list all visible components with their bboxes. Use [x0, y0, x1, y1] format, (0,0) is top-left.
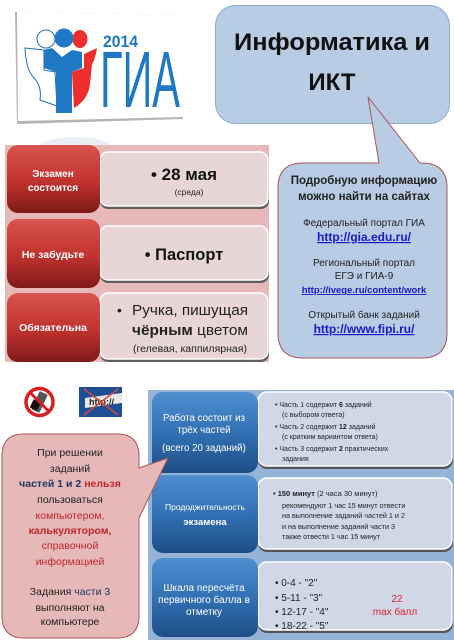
row: parts: Работа состоит из [163, 413, 246, 424]
panel: restrictions callout: компьютером, [36, 510, 104, 522]
icon: no phone [26, 388, 53, 416]
logo figures [25, 28, 97, 113]
row: score scale: 22 [391, 594, 403, 605]
row: duration: также отвести 1 час 15 минут [282, 532, 381, 541]
row: parts: • Часть 3 содержит 2 практических [275, 446, 389, 453]
row: score scale: первичного балла в [158, 594, 250, 606]
row: passport: Не забудьте [22, 249, 84, 261]
title box: Информатика и [234, 29, 430, 56]
row: duration: рекомендуют 1 час 15 минут отвести [282, 501, 405, 510]
row: duration: Прододжительность [165, 502, 246, 512]
row: score scale [152, 558, 453, 637]
panel: exam facts [5, 145, 269, 362]
row: score scale: • 18-22 - "5" [275, 621, 329, 632]
row: passport [7, 219, 269, 288]
row: score scale: • 5-11 - "3" [275, 593, 323, 604]
row: pen: (гелевая, каппилярная) [133, 344, 247, 355]
row: pen: • [117, 302, 122, 318]
panel: sites callout: Открытый банк заданий [308, 309, 420, 321]
row: parts: (всего 20 заданий) [162, 443, 246, 454]
row: parts: задания [282, 456, 309, 463]
panel: exam structure [148, 390, 454, 640]
panel: restrictions callout: Задания части 3 [30, 586, 110, 598]
title box: ИКТ [308, 69, 356, 96]
row: duration: • 150 минут (2 часа 30 минут) [273, 489, 378, 498]
row: pen [7, 293, 269, 362]
row: score scale: Шкала пересчёта [163, 583, 245, 594]
row: exam date: • 28 мая [151, 165, 217, 184]
row: pen: чёрным цветом [132, 323, 248, 339]
icon: no internet: http:// [89, 397, 114, 407]
panel: sites callout: http://www.fipi.ru/ [314, 322, 415, 336]
row: duration: на выполнение заданий частей 1 и 2 [282, 511, 405, 520]
panel: sites callout: можно найти на сайтах [298, 191, 431, 203]
panel: restrictions callout: компьютере [41, 616, 100, 628]
icon: no internet [79, 387, 122, 417]
panel: restrictions callout: частей 1 и 2 нельзя [19, 478, 121, 490]
row: exam date: (среда) [175, 187, 204, 197]
row: pen: Обязательна [19, 322, 87, 334]
panel: sites callout: Федеральный портал ГИА [303, 218, 425, 229]
panel: sites callout: http://ivege.ru/content/work [302, 285, 427, 296]
panel: sites callout: Подробную информацию [291, 175, 437, 187]
logo text: 2014 ГИА: 2014 [103, 32, 138, 51]
logo text: 2014 ГИА [100, 32, 180, 124]
panel: restrictions callout: информацией [36, 556, 104, 568]
panel: restrictions callout: заданий [50, 463, 90, 475]
row: parts: трёх частей [177, 425, 231, 436]
row: duration: экзамена [183, 517, 227, 528]
logo card [15, 12, 185, 124]
panel: restrictions callout: пользоваться [37, 494, 103, 506]
row: parts: • Часть 1 содержит 6 заданий [275, 401, 372, 409]
row: duration: и на выполнение заданий части 3 [282, 522, 395, 531]
panel: restrictions callout: калькулятором, [29, 525, 111, 537]
row: parts: (с кратким вариантом ответа) [282, 434, 378, 441]
row: exam date: Экзамен [32, 169, 74, 180]
panel: restrictions callout [2, 434, 168, 638]
panel: sites callout: http://gia.edu.ru/ [317, 230, 412, 244]
row: parts: (с выбором ответа) [282, 411, 345, 419]
row: exam date [7, 145, 269, 213]
row: pen: Ручка, пишущая [132, 303, 248, 319]
panel: restrictions callout: выполняют на [35, 602, 105, 614]
row: parts: • Часть 2 содержит 12 заданий [275, 423, 376, 431]
row: exam date: состоится [28, 183, 78, 194]
row: score scale: • 12-17 - "4" [275, 607, 329, 618]
row: score scale: max балл [373, 606, 417, 618]
row: duration [152, 475, 453, 553]
logo text: 2014 ГИА: ГИА [100, 35, 180, 124]
row: score scale: • 0-4 - "2" [275, 578, 318, 589]
panel: sites callout: Региональный портал [313, 258, 415, 269]
title box [216, 6, 450, 124]
row: passport: • Паспорт [145, 246, 223, 264]
row: parts [152, 392, 453, 473]
panel: sites callout: ЕГЭ и ГИА-9 [335, 271, 394, 282]
panel: restrictions callout: справочной [42, 540, 98, 552]
panel: sites callout [278, 97, 447, 358]
panel: restrictions callout: При решении [37, 447, 103, 459]
row: score scale: отметку [186, 607, 222, 618]
